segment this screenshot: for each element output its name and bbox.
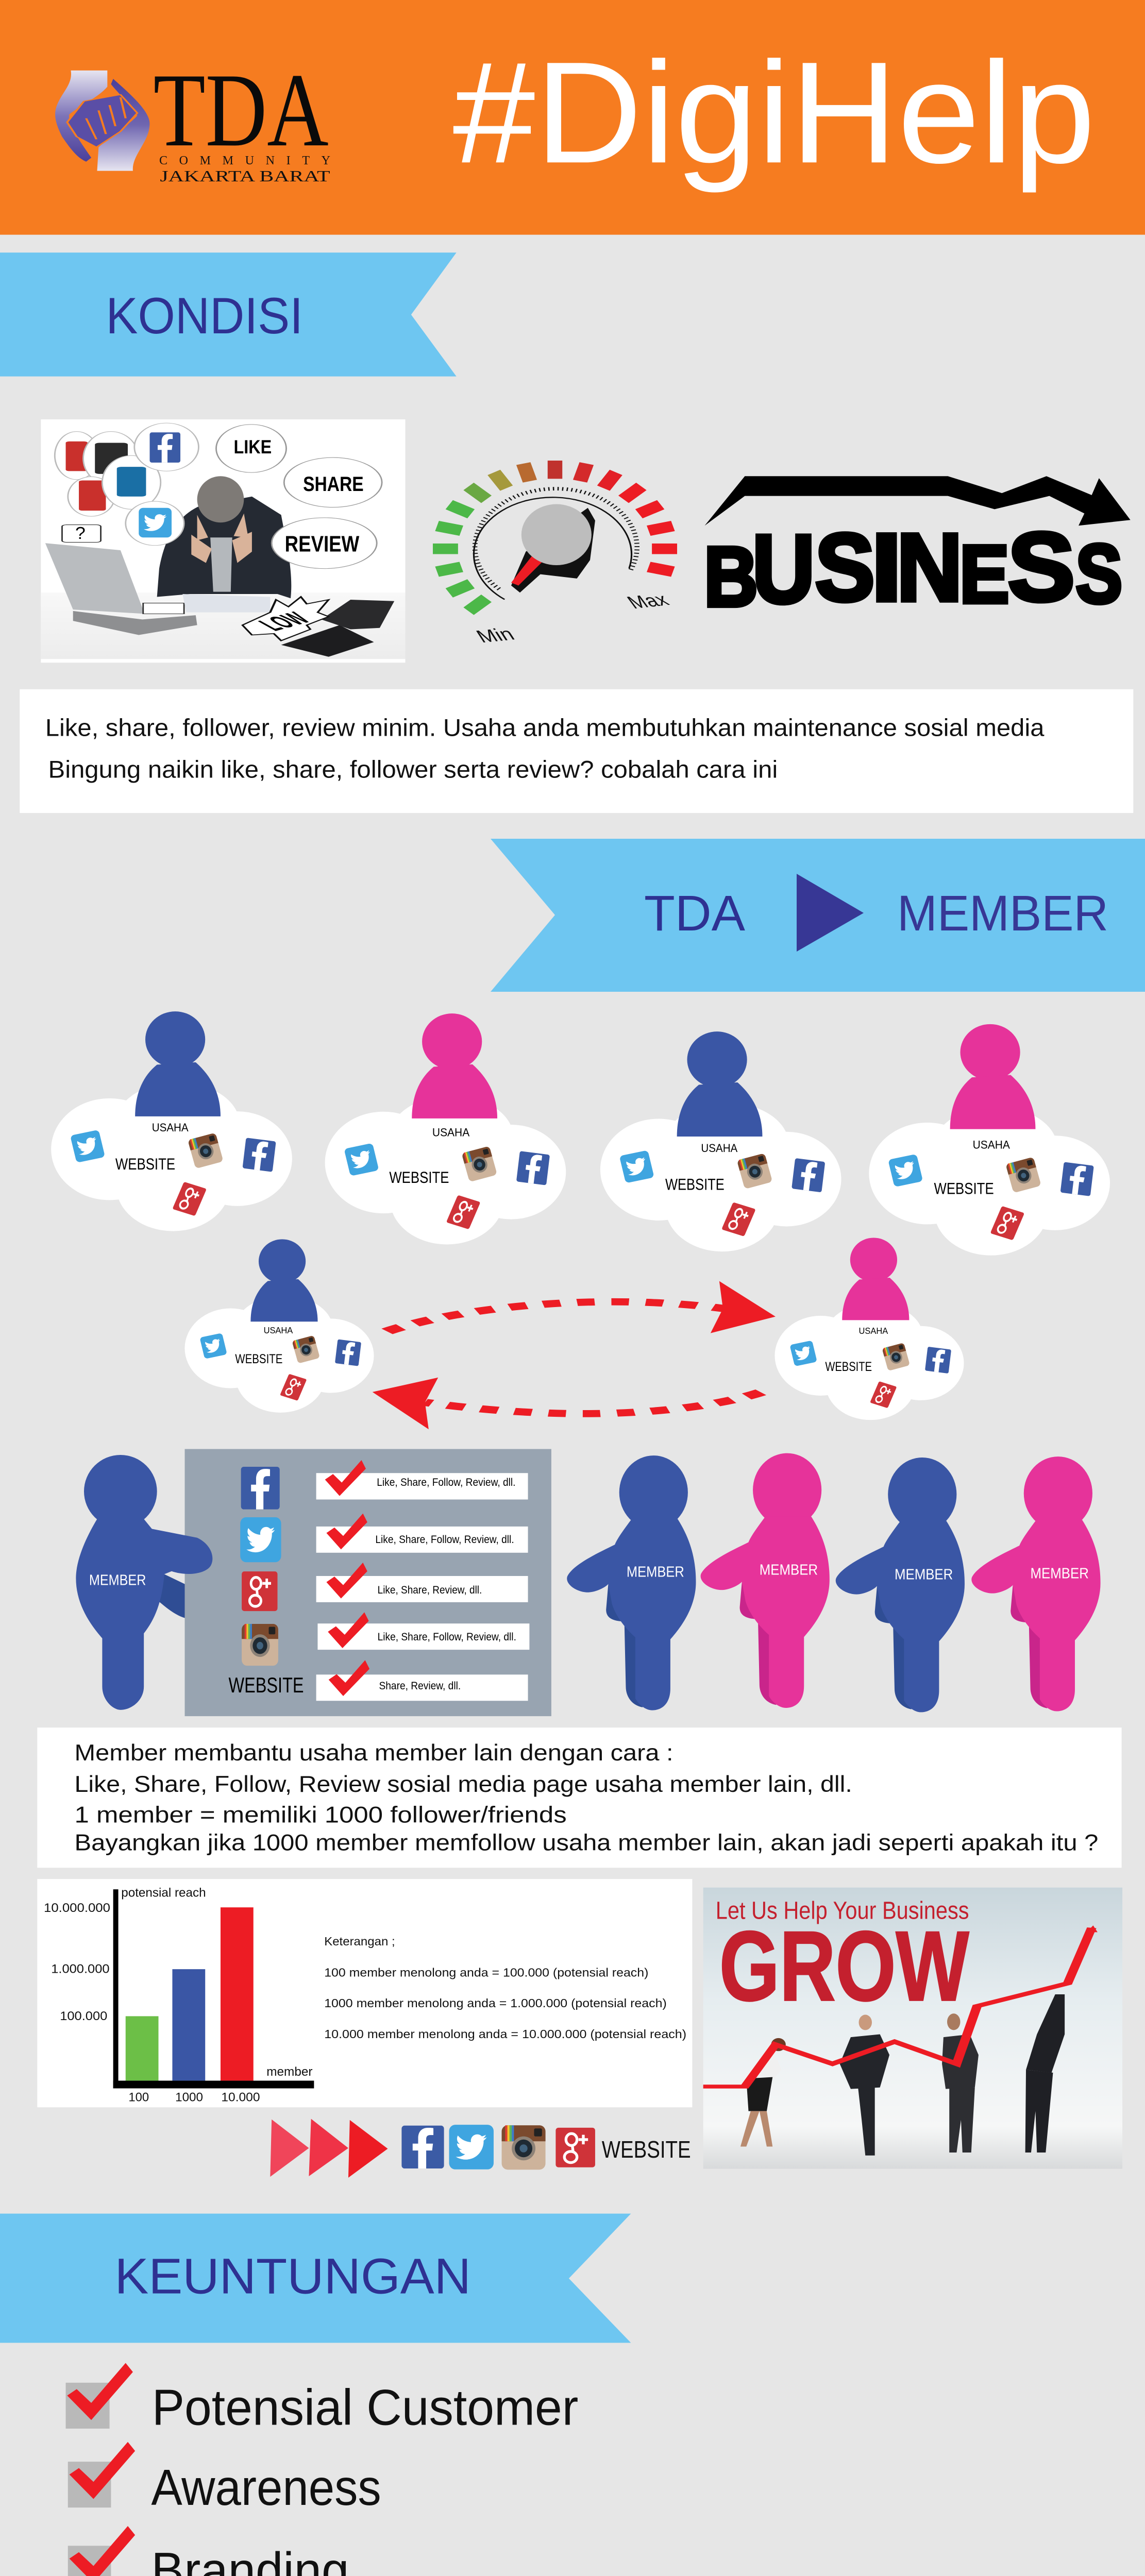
member support section: Like, Share, Follow, Review, dll. xyxy=(375,1533,514,1546)
cloud: member 1: USAHA xyxy=(152,1121,189,1134)
cloud: member 4: USAHA xyxy=(973,1138,1010,1151)
figure: member pointing right: MEMBER xyxy=(89,1571,146,1588)
benefit: potensial customer: Potensial Customer xyxy=(152,2379,578,2436)
icon: twitter xyxy=(240,1517,281,1562)
icon: TDA hands logo xyxy=(55,71,150,171)
document and desk items xyxy=(182,594,270,613)
panel: reach chart: member xyxy=(266,2064,313,2078)
header band xyxy=(0,0,1145,377)
community label: COMMUNITY xyxy=(159,154,330,167)
member support section: MEMBER xyxy=(760,1562,818,1578)
row: twitter actions xyxy=(316,1514,528,1553)
businessman 1 xyxy=(840,2015,889,2156)
business wordmark: B xyxy=(704,529,758,624)
banner: TDA to member: TDA xyxy=(644,885,745,941)
benefit: branding xyxy=(68,2526,349,2576)
header band: TDA xyxy=(154,52,329,168)
bar chart: 100 xyxy=(128,2090,149,2104)
businessman 2 xyxy=(942,2013,979,2153)
cloud: member 3: WEBSITE xyxy=(665,1175,725,1193)
chart legend xyxy=(324,1935,686,2041)
panel: stressed man photo: SHARE xyxy=(303,473,364,495)
banner: keuntungan: KEUNTUNGAN xyxy=(114,2248,471,2304)
text block: how members help: 1 member = memiliki 1000 follower/friends xyxy=(75,1802,567,1827)
figure: member blue 2 xyxy=(836,1458,965,1712)
row: google plus actions xyxy=(316,1563,528,1602)
cloud: helper member blue: WEBSITE xyxy=(235,1352,282,1366)
icon: google plus xyxy=(242,1571,277,1611)
laptop xyxy=(45,543,197,635)
figure: member pointing right xyxy=(76,1455,212,1710)
social icon bubbles xyxy=(55,423,198,546)
chart legend: Keterangan ; xyxy=(324,1935,395,1948)
banner: kondisi: KONDISI xyxy=(106,287,303,344)
row: website actions xyxy=(316,1660,528,1701)
banner: TDA to member xyxy=(491,839,1145,992)
question bubble xyxy=(62,523,101,543)
figure: member pink 2 xyxy=(971,1456,1101,1711)
member support section: MEMBER xyxy=(895,1566,953,1583)
woman xyxy=(740,2038,786,2147)
bar chart: 1.000.000 xyxy=(51,1962,110,1976)
member support section: Like, Share, Follow, Review, dll. xyxy=(378,1631,516,1643)
bar chart: 10.000 xyxy=(221,2090,260,2104)
panel: social checklist xyxy=(185,1449,551,1716)
explanation and reach section: 10.000 member menolong anda = 10.000.000 (potensial reach) xyxy=(324,2028,686,2041)
gauge max label: Max xyxy=(623,590,673,613)
row: facebook actions xyxy=(316,1460,528,1500)
business wordmark: U xyxy=(752,515,815,623)
question bubble: ? xyxy=(75,523,86,543)
member support section xyxy=(76,1449,1101,1716)
panel: social checklist: WEBSITE xyxy=(229,1673,304,1697)
benefit: potensial customer xyxy=(66,2363,578,2436)
business arrow xyxy=(705,476,1131,526)
low burst xyxy=(242,597,329,640)
low burst: LOW xyxy=(251,608,317,635)
arrow: triple chevrons xyxy=(270,2119,388,2178)
panel: social checklist: Share, Review, dll. xyxy=(379,1680,461,1692)
cloud: helper member pink xyxy=(774,1238,964,1420)
cloud: helper member pink: USAHA xyxy=(859,1326,888,1336)
explanation and reach section: 1000 member menolong anda = 1.000.000 (potensial reach) xyxy=(324,1997,667,2010)
business wordmark xyxy=(704,512,1122,624)
panel: stressed man photo xyxy=(41,419,405,663)
text block: how members help xyxy=(37,1727,1122,1868)
cloud: helper member pink: WEBSITE xyxy=(825,1360,872,1374)
icon: facebook xyxy=(241,1467,280,1510)
member businesses network xyxy=(51,1011,1110,1429)
benefits and footer xyxy=(0,2214,1132,2576)
cloud: member 1: WEBSITE xyxy=(115,1155,175,1173)
cloud: member 2: WEBSITE xyxy=(389,1168,449,1187)
review bubble xyxy=(272,518,377,569)
figure: member blue 1 xyxy=(567,1455,696,1710)
cloud: member 3 xyxy=(600,1031,841,1251)
figure back leg xyxy=(159,1574,185,1618)
cloud: member 3: USAHA xyxy=(701,1142,738,1155)
banner: keuntungan xyxy=(0,2214,631,2343)
row: instagram actions xyxy=(317,1612,529,1650)
panel: reach chart xyxy=(37,1879,692,2107)
icon: instagram xyxy=(242,1624,278,1666)
share bubble xyxy=(284,457,382,507)
cloud: helper member blue xyxy=(184,1239,374,1413)
cloud: member 4 xyxy=(869,1024,1110,1256)
figure: member pink 1 xyxy=(701,1453,830,1708)
kondisi visuals xyxy=(20,419,1133,813)
bar chart xyxy=(44,1886,314,2104)
explanation and reach section: WEBSITE xyxy=(602,2137,691,2163)
explanation and reach section: 100 member menolong anda = 100.000 (potensial reach) xyxy=(324,1966,648,1979)
panel: grow photo xyxy=(703,1888,1122,2169)
bar chart: potensial reach xyxy=(121,1886,206,1900)
growth arrow xyxy=(703,1925,1098,2087)
cloud: member 2: USAHA xyxy=(432,1126,470,1139)
cloud: member 4: WEBSITE xyxy=(934,1179,994,1197)
panel: stressed man photo: REVIEW xyxy=(285,531,360,556)
member support section: MEMBER xyxy=(627,1563,684,1580)
business wordmark: S xyxy=(815,514,875,621)
text block: kondisi xyxy=(20,689,1133,813)
benefit: awareness xyxy=(68,2442,381,2516)
cloud: helper member blue: USAHA xyxy=(264,1326,293,1335)
arrow: dashed to the left xyxy=(373,1378,761,1429)
banner: TDA to member: MEMBER xyxy=(897,885,1108,941)
gauge min label: Min xyxy=(472,624,518,647)
member support section: Like, Share, Review, dll. xyxy=(378,1584,482,1596)
benefit: awareness: Awareness xyxy=(151,2460,381,2516)
icons: social row xyxy=(401,2125,595,2170)
cloud: member 2 xyxy=(325,1013,566,1244)
business wordmark: N xyxy=(897,514,963,621)
explanation and reach section xyxy=(37,1727,1122,2178)
panel: stressed man photo: LIKE xyxy=(233,436,272,457)
cloud: member 1 xyxy=(51,1011,292,1231)
banner: kondisi xyxy=(0,252,457,377)
man xyxy=(157,476,291,598)
header band: JAKARTA BARAT xyxy=(160,167,330,185)
bar chart: 1000 xyxy=(175,2090,203,2104)
business wordmark: I xyxy=(871,514,902,621)
businessman 3 xyxy=(1025,1994,1065,2153)
business wordmark: E xyxy=(959,529,1009,620)
arrow: dashed to the right xyxy=(387,1281,776,1333)
member support section: Like, Share, Follow, Review, dll. xyxy=(377,1476,515,1488)
like bubble xyxy=(216,425,287,472)
bar chart: 10.000.000 xyxy=(44,1901,110,1914)
gauge xyxy=(433,461,677,615)
bar chart: 100.000 xyxy=(60,2009,107,2023)
